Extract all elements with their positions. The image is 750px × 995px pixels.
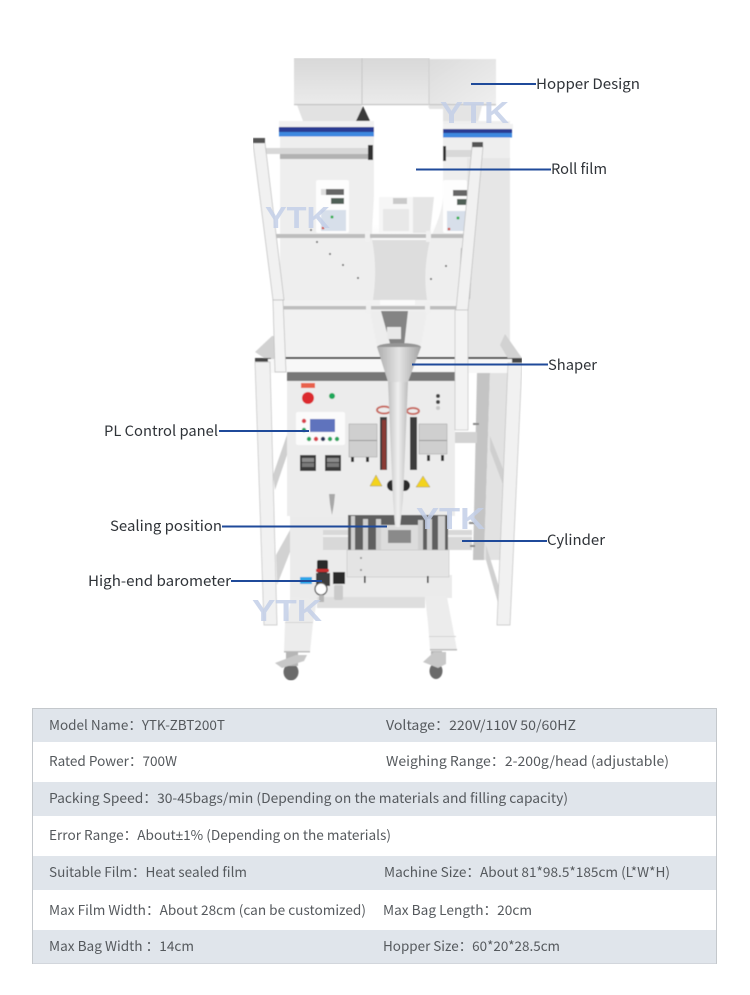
callout: Shaper: Shaper xyxy=(548,354,597,375)
callout: High-end barometer: High-end barometer xyxy=(88,570,231,591)
PLC control panel xyxy=(296,412,345,445)
right caster xyxy=(423,651,446,679)
stand feet xyxy=(284,597,457,652)
callout: Hopper Design: Hopper Design xyxy=(536,73,640,94)
watermark: YTK bottom left: YTK xyxy=(252,593,323,628)
row 1: model name and voltage: Voltage：220V/110V 50/60HZ xyxy=(386,714,576,734)
watermark: YTK middle right: YTK xyxy=(416,501,486,536)
row 3: packing speed: Packing Speed：30-45bags/min (Depending on the materials and filling capacity) xyxy=(49,787,568,807)
row 2: rated power and weighing range: Weighing Range：2-200g/head (adjustable) xyxy=(386,750,669,770)
temperature controllers xyxy=(300,455,341,471)
row 7: max bag width and hopper size xyxy=(33,930,716,964)
front control housing xyxy=(287,381,455,608)
lower band and table frame xyxy=(255,334,522,381)
row 6: max film width and max bag length: Max Film Width：About 28cm (can be customized) xyxy=(49,899,366,919)
right weighing display xyxy=(443,180,467,233)
row 5: suitable film and machine size: Machine Size：About 81*98.5*185cm (L*W*H) xyxy=(384,861,670,881)
row 5: suitable film and machine size: Suitable Film：Heat sealed film xyxy=(49,861,247,881)
cone shaper and tube xyxy=(377,343,421,527)
row 4: error range: Error Range：About±1% (Depending on the materials) xyxy=(49,824,391,844)
rear bracket and bolts xyxy=(360,423,479,571)
horizontal rails xyxy=(265,145,475,313)
warning triangles xyxy=(370,475,440,567)
emergency stop and indicators xyxy=(301,383,440,410)
front legs of frame xyxy=(255,362,522,625)
machine illustration xyxy=(253,58,522,680)
row 2: rated power and weighing range xyxy=(49,750,669,770)
barometer air filter unit xyxy=(300,560,345,602)
watermark: YTK upper left: YTK xyxy=(265,200,331,235)
row 1: model name and voltage: Model Name：YTK-ZBT200T xyxy=(49,714,225,734)
frame uprights xyxy=(253,138,483,430)
watermark: YTK top right: YTK xyxy=(440,95,510,130)
callout: Roll film: Roll film xyxy=(551,158,607,179)
row 3: packing speed xyxy=(33,782,716,816)
row 2: rated power and weighing range: Rated Power：700W xyxy=(49,750,177,770)
callout: Cylinder: Cylinder xyxy=(547,529,605,550)
row 6: max film width and max bag length: Max Bag Length：20cm xyxy=(383,899,532,919)
hopper xyxy=(294,58,496,122)
sealing position assembly xyxy=(323,515,472,583)
row 7: max bag width and hopper size: Hopper Size：60*20*28.5cm xyxy=(383,935,560,955)
row 6: max film width and max bag length xyxy=(49,899,532,919)
upper weighing body xyxy=(279,121,513,359)
left caster xyxy=(275,652,307,680)
toggle switch xyxy=(329,494,335,515)
row 1: model name and voltage xyxy=(33,709,716,742)
lower frame: rear inner legs and braces xyxy=(273,373,508,610)
callout: Sealing position: Sealing position xyxy=(110,515,222,536)
side plate xyxy=(458,247,473,301)
row 5: suitable film and machine size xyxy=(33,856,716,890)
row 7: max bag width and hopper size: Max Bag Width ：14cm xyxy=(49,935,194,955)
sealing blocks xyxy=(349,406,447,491)
roll film xyxy=(370,109,443,350)
callout: PL Control panel: PL Control panel xyxy=(104,420,218,441)
specification table xyxy=(32,708,716,964)
left weighing display xyxy=(316,180,349,233)
